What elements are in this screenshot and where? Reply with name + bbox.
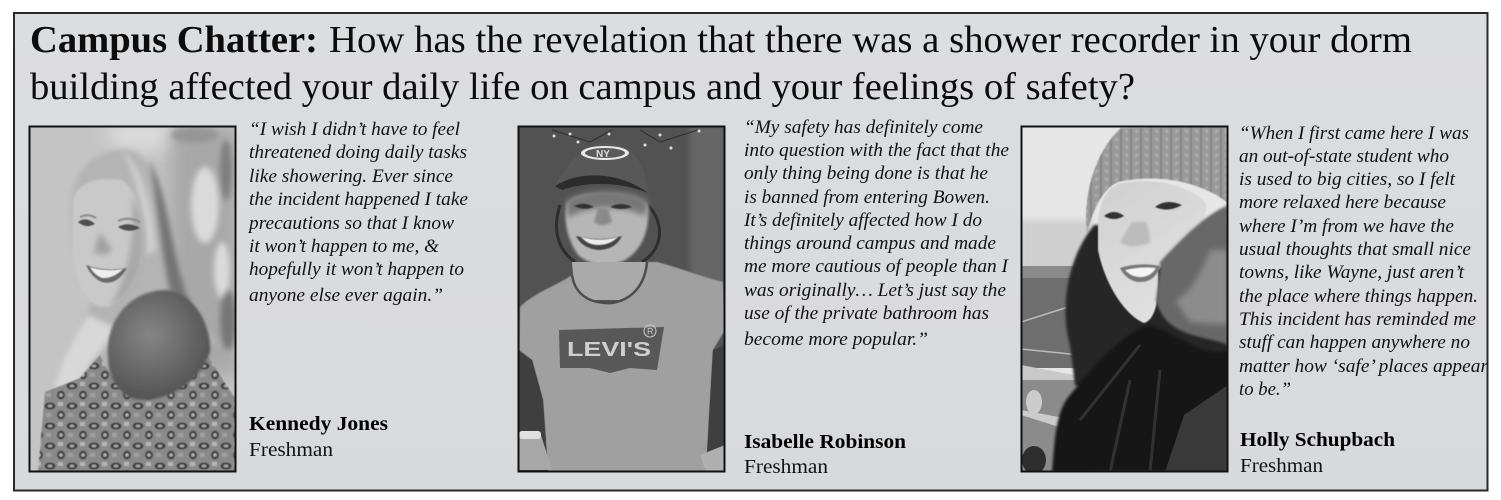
quote: Kennedy Jones: precautions so that I know <box>247 214 455 234</box>
name: Kennedy Jones: Freshman <box>249 440 333 461</box>
heading: How has the revelation that there was a shower recorder in your dorm <box>329 19 1412 61</box>
name: Holly Schupbach: Holly Schupbach <box>1240 430 1395 451</box>
quote: Isabelle Robinson: is banned from entering Bowen. <box>744 188 990 208</box>
quote: Holly Schupbach: “When I first came here I was <box>1239 124 1469 144</box>
quote: Isabelle Robinson: me more cautious of people than I <box>744 257 1009 277</box>
name: Kennedy Jones <box>249 414 388 461</box>
quote: Holly Schupbach: usual thoughts that small nice <box>1239 240 1471 260</box>
name: Kennedy Jones: Kennedy Jones <box>249 414 388 435</box>
quote: Holly Schupbach: the place where things happen. <box>1239 287 1478 307</box>
quote: Holly Schupbach: where I’m from we have the <box>1239 217 1454 237</box>
photo: Kennedy Jones <box>29 120 240 472</box>
quote: Holly Schupbach: matter how ‘safe’ places appear <box>1239 357 1489 377</box>
name: Isabelle Robinson: Freshman <box>744 457 828 478</box>
quote: Isabelle Robinson: “My safety has definitely come <box>744 118 983 138</box>
quote: Kennedy Jones: hopefully it won’t happen to <box>249 260 464 280</box>
photo: Isabelle Robinson <box>518 126 725 472</box>
quote: Kennedy Jones: threatened doing daily tasks <box>249 143 467 163</box>
photo: Holly Schupbach <box>1021 126 1228 474</box>
photo: Isabelle Robinson: R <box>647 326 654 336</box>
quote: Holly Schupbach: to be.” <box>1239 380 1291 400</box>
quote: Holly Schupbach: is used to big cities, so I felt <box>1239 170 1456 190</box>
quote: Holly Schupbach <box>1239 124 1489 400</box>
heading: building affected your daily life on campus and your feelings of safety? <box>30 66 1135 108</box>
quote: Isabelle Robinson: into question with the fact that the <box>744 141 1009 161</box>
quote: Kennedy Jones: “I wish I didn’t have to feel <box>249 120 460 140</box>
quote: Isabelle Robinson: only thing being done is that he <box>744 164 988 184</box>
quote: Isabelle Robinson <box>743 118 1009 350</box>
quote: Isabelle Robinson: It’s definitely affected how I do <box>743 211 982 231</box>
quote: Kennedy Jones: the incident happened I take <box>249 190 468 210</box>
name: Holly Schupbach: Freshman <box>1240 456 1323 477</box>
name: Isabelle Robinson <box>744 432 906 478</box>
quote: Kennedy Jones <box>247 120 468 306</box>
heading: Campus Chatter: <box>30 19 318 61</box>
quote: Isabelle Robinson: become more popular.” <box>744 330 928 350</box>
quote: Kennedy Jones: like showering. Ever since <box>249 167 453 187</box>
quote: Holly Schupbach: more relaxed here because <box>1239 193 1446 213</box>
name: Holly Schupbach <box>1240 430 1395 477</box>
quote: Isabelle Robinson: use of the private bathroom has <box>744 304 989 324</box>
quote: Kennedy Jones: anyone else ever again.” <box>249 286 443 306</box>
quote: Holly Schupbach: an out-of-state student who <box>1239 147 1449 167</box>
quote: Isabelle Robinson: things around campus and made <box>744 234 996 254</box>
quote: Kennedy Jones: it won’t happen to me, & <box>249 237 440 257</box>
name: Isabelle Robinson: Isabelle Robinson <box>744 432 906 453</box>
quote: Isabelle Robinson: was originally… Let’s just say the <box>744 281 1006 301</box>
photo: Isabelle Robinson: LEVI'S <box>567 339 651 361</box>
quote: Holly Schupbach: stuff can happen anywhere no <box>1239 333 1470 353</box>
photo: Isabelle Robinson: NY <box>596 149 610 160</box>
quote: Holly Schupbach: This incident has reminded me <box>1239 310 1476 330</box>
heading <box>30 19 1412 108</box>
quote: Holly Schupbach: towns, like Wayne, just aren’t <box>1239 263 1465 283</box>
